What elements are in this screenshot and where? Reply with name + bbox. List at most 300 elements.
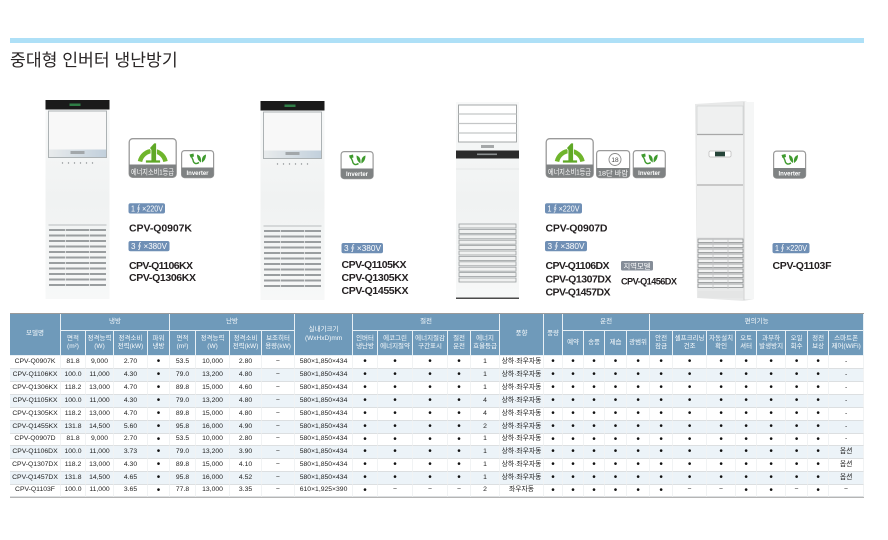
row: CPV-Q1305KX [10, 408, 864, 421]
row: CPV-Q1306KX: • [636, 382, 640, 393]
row: CPV-Q0907K: 53.5 [176, 358, 189, 365]
row: CPV-Q1106KX: • [614, 369, 617, 380]
table header: columns: 제습 [610, 339, 622, 346]
row: CPV-Q1455KX: 2 [483, 423, 487, 430]
row: CPV-Q0907K: 580×1,850×434 [300, 358, 347, 365]
row: CPV-Q1103F: CPV-Q1103F [15, 486, 55, 493]
row: CPV-Q1106DX: • [795, 446, 798, 457]
row: CPV-Q1105KX: • [428, 395, 432, 406]
row: CPV-Q1106DX: 11,000 [89, 448, 110, 455]
table header: columns: 인버터 [356, 335, 374, 342]
row: CPV-Q1105KX: • [457, 395, 461, 406]
model names: CPV-Q1305KX [342, 272, 408, 284]
icon: inverter: Inverter [186, 171, 209, 177]
row: CPV-Q0907D: 2.70 [124, 435, 137, 442]
row: CPV-Q0907K: • [457, 356, 461, 367]
model names [546, 260, 612, 298]
table header: columns: (W) [94, 343, 105, 350]
row: CPV-Q1305KX: 580×1,850×434 [300, 410, 347, 417]
row: CPV-Q1103F: 11,000 [89, 486, 110, 493]
row: CPV-Q1306KX: 13,000 [89, 384, 110, 391]
row: CPV-Q1307DX: • [428, 459, 432, 470]
row: CPV-Q0907K: 10,000 [202, 358, 223, 365]
row: CPV-Q1305KX: CPV-Q1305KX [12, 410, 58, 417]
row: CPV-Q0907K: 9,000 [91, 358, 108, 365]
row: CPV-Q1457DX: • [571, 472, 575, 483]
row: CPV-Q0907K: • [816, 356, 820, 367]
row: CPV-Q1105KX: • [614, 395, 617, 406]
row: CPV-Q1455KX: • [688, 421, 691, 432]
row: CPV-Q1106KX: • [157, 369, 160, 380]
model names: CPV-Q1455KX [342, 285, 408, 297]
row: CPV-Q1106KX: • [592, 369, 596, 380]
table header: groups: 절전 [420, 318, 432, 325]
row: CPV-Q1457DX: 131.8 [64, 474, 82, 481]
row: CPV-Q0907K: • [769, 356, 773, 367]
row: CPV-Q1306KX: • [719, 382, 723, 393]
row: CPV-Q1106KX: - [845, 371, 847, 378]
row: CPV-Q1457DX: 4.52 [239, 474, 252, 481]
row: CPV-Q1106KX: • [719, 369, 723, 380]
row: CPV-Q1306KX: • [457, 382, 461, 393]
row: CPV-Q1305KX: • [719, 408, 723, 419]
row: CPV-Q1105KX: • [157, 395, 160, 406]
row: CPV-Q1455KX: • [659, 421, 663, 432]
specification table [10, 313, 864, 498]
row: CPV-Q1103F [10, 485, 864, 497]
row: CPV-Q1106DX: • [592, 446, 596, 457]
row: CPV-Q1457DX: • [551, 472, 555, 483]
row: CPV-Q1105KX: • [571, 395, 575, 406]
row: CPV-Q1306KX: • [816, 382, 820, 393]
row: CPV-Q1307DX: CPV-Q1307DX [12, 461, 58, 468]
row: CPV-Q1306KX: • [363, 382, 367, 393]
row: CPV-Q1455KX: • [457, 421, 461, 432]
row: CPV-Q1105KX: 4.30 [124, 397, 137, 404]
row: CPV-Q1305KX: • [636, 408, 640, 419]
row: CPV-Q1455KX: • [795, 421, 798, 432]
row: CPV-Q1305KX: 118.2 [65, 410, 81, 417]
row: CPV-Q1305KX: • [428, 408, 432, 419]
row: CPV-Q1106DX: 3.90 [239, 448, 252, 455]
row: CPV-Q1455KX: • [363, 421, 367, 432]
table header: columns: 셀프크리닝 [675, 335, 705, 342]
row: CPV-Q1105KX: • [816, 395, 820, 406]
row: CPV-Q1106DX: • [614, 446, 617, 457]
row: CPV-Q1305KX: • [614, 408, 617, 419]
table header: groups: 모델명 [26, 330, 44, 337]
row: CPV-Q1455KX: • [592, 421, 596, 432]
table header: columns: 냉난방 [356, 343, 374, 350]
row: CPV-Q1305KX: • [457, 408, 461, 419]
row: CPV-Q0907K: • [614, 356, 617, 367]
icon: energy grade 1 [129, 139, 176, 177]
row: CPV-Q1307DX: • [393, 459, 397, 470]
row: CPV-Q1106KX: • [363, 369, 367, 380]
row: CPV-Q1106KX: 580×1,850×434 [300, 371, 347, 378]
row: CPV-Q1106KX: − [276, 371, 280, 378]
row: CPV-Q1455KX: − [276, 423, 280, 430]
row: CPV-Q1457DX: • [363, 472, 367, 483]
row: CPV-Q0907D: 81.8 [66, 435, 80, 442]
row: CPV-Q0907D: 2.80 [239, 435, 252, 442]
row: CPV-Q1103F: 2 [483, 486, 487, 493]
row: CPV-Q0907D: - [845, 435, 847, 442]
row: CPV-Q1457DX: • [688, 472, 691, 483]
table header: columns: 발생방지 [759, 343, 783, 350]
row: CPV-Q1103F: 좌우자동 [509, 486, 534, 493]
table header: columns: 전력(kW) [233, 343, 258, 350]
row: CPV-Q1457DX: 옵션 [840, 474, 852, 481]
table header: columns: 광범위 [629, 339, 647, 346]
row: CPV-Q1103F: 3.35 [239, 486, 252, 493]
voltage chip: single phase: 1∮×220V [131, 204, 164, 213]
row: CPV-Q1106DX: 3.73 [124, 448, 137, 455]
row: CPV-Q0907K: • [744, 356, 748, 367]
row: CPV-Q1306KX: CPV-Q1306KX [12, 384, 58, 391]
table header: columns: 건조 [684, 343, 696, 350]
table header: columns: 에코그린 [383, 335, 407, 342]
table header: columns [61, 331, 864, 356]
row: CPV-Q1457DX: • [636, 472, 640, 483]
table header: columns: 용량(kW) [265, 343, 291, 350]
row: CPV-Q1455KX: CPV-Q1455KX [12, 423, 58, 430]
row: CPV-Q0907K: • [795, 356, 798, 367]
icon: inverter: Inverter [346, 172, 369, 178]
row: CPV-Q1305KX: • [571, 408, 575, 419]
icon: energy grade 1: 에너지소비1등급 [548, 167, 591, 176]
row: CPV-Q1455KX: • [428, 421, 432, 432]
row: CPV-Q0907D: CPV-Q0907D [14, 435, 56, 442]
row: CPV-Q1105KX: • [744, 395, 748, 406]
row: CPV-Q0907K: - [845, 358, 847, 365]
row: CPV-Q1106DX: CPV-Q1106DX [12, 448, 58, 455]
table header: columns: 오토 [740, 335, 752, 342]
row: CPV-Q1103F: 100.0 [64, 486, 82, 493]
row: CPV-Q1305KX: − [276, 410, 280, 417]
row: CPV-Q1103F: − [457, 486, 461, 493]
row: CPV-Q1105KX: • [769, 395, 773, 406]
row: CPV-Q0907D: 1 [483, 435, 487, 442]
row: CPV-Q1105KX: • [551, 395, 555, 406]
row: CPV-Q1106KX: • [551, 369, 555, 380]
icon: inverter [633, 151, 665, 178]
row: CPV-Q0907K: 상하·좌우자동 [502, 358, 541, 365]
row: CPV-Q1306KX: 118.2 [65, 384, 81, 391]
row: CPV-Q1106KX: 13,200 [202, 371, 223, 378]
row: CPV-Q1307DX: 4.10 [239, 461, 252, 468]
table header: columns: 송풍 [588, 339, 600, 346]
voltage chip: three phase: 3∮×380V [131, 242, 168, 251]
row: CPV-Q1105KX: • [636, 395, 640, 406]
row: CPV-Q1106DX: 79.0 [176, 448, 189, 455]
row: CPV-Q1307DX: 118.2 [65, 461, 81, 468]
row: CPV-Q1103F: − [393, 486, 397, 493]
row: CPV-Q1106KX: • [688, 369, 691, 380]
row: CPV-Q1307DX: • [157, 459, 160, 470]
table header: columns: 에너지 [476, 335, 494, 342]
row: CPV-Q1103F: − [276, 486, 280, 493]
row: CPV-Q1457DX: • [428, 472, 432, 483]
row: CPV-Q1457DX: • [744, 472, 748, 483]
row: CPV-Q1106KX: • [795, 369, 798, 380]
row: CPV-Q1105KX: • [659, 395, 663, 406]
row: CPV-Q0907D: 상하·좌우자동 [502, 435, 541, 442]
icon: inverter [341, 152, 373, 179]
row: CPV-Q1103F: − [688, 486, 692, 493]
table header: columns: (W) [207, 343, 218, 350]
row: CPV-Q1457DX: − [276, 474, 280, 481]
row: CPV-Q1305KX: 15,000 [202, 410, 223, 417]
row: CPV-Q1105KX: • [363, 395, 367, 406]
row: CPV-Q1305KX: • [592, 408, 596, 419]
row: CPV-Q1106DX: • [393, 446, 397, 457]
row: CPV-Q1307DX: 1 [483, 461, 487, 468]
model names: CPV-Q1457DX [546, 286, 610, 298]
table header: groups: 풍량 [547, 330, 559, 337]
row: CPV-Q1306KX: 4.70 [124, 384, 137, 391]
row: CPV-Q1455KX: • [393, 421, 397, 432]
model name: CPV-Q0907K [129, 222, 192, 234]
row: CPV-Q1105KX: 79.0 [176, 397, 189, 404]
row: CPV-Q0907D: − [276, 435, 280, 442]
icon: inverter: Inverter [638, 171, 661, 177]
row: CPV-Q1457DX [10, 472, 864, 485]
row: CPV-Q1307DX: 580×1,850×434 [300, 461, 347, 468]
row: CPV-Q1105KX: 4 [483, 397, 487, 404]
row: CPV-Q1106DX: • [719, 446, 723, 457]
row: CPV-Q1457DX: • [457, 472, 461, 483]
row: CPV-Q1306KX: • [744, 382, 748, 393]
row: CPV-Q1307DX: • [795, 459, 798, 470]
row: CPV-Q1306KX: • [614, 382, 617, 393]
model names [129, 260, 196, 284]
row: CPV-Q1457DX: 1 [483, 474, 487, 481]
regional model chip [621, 261, 653, 270]
row: CPV-Q1455KX: 580×1,850×434 [300, 423, 347, 430]
row: CPV-Q1105KX: 13,200 [202, 397, 223, 404]
row: CPV-Q1455KX: • [744, 421, 748, 432]
product: CPV-Q0907D series unit [456, 102, 519, 299]
row: CPV-Q1306KX: • [795, 382, 798, 393]
table header: columns: 보상 [812, 343, 824, 350]
row: CPV-Q0907D: 53.5 [176, 435, 189, 442]
row: CPV-Q1106DX: • [688, 446, 691, 457]
row: CPV-Q1457DX: • [592, 472, 596, 483]
row: CPV-Q1307DX: 옵션 [840, 461, 852, 468]
table header: columns: 면적 [177, 335, 189, 342]
row: CPV-Q1105KX: • [688, 395, 691, 406]
row: CPV-Q1307DX: 15,000 [202, 461, 223, 468]
row: CPV-Q1106KX [10, 369, 864, 382]
row: CPV-Q1305KX: • [659, 408, 663, 419]
row: CPV-Q1307DX: • [744, 459, 748, 470]
table header: columns: 확인 [715, 343, 727, 350]
table header: columns: (m²) [67, 343, 79, 350]
row: CPV-Q1105KX: - [845, 397, 847, 404]
row: CPV-Q1103F: − [719, 486, 723, 493]
row: CPV-Q1305KX: • [551, 408, 555, 419]
voltage chip: three phase: 3∮×380V [344, 244, 382, 253]
row: CPV-Q1455KX: • [571, 421, 575, 432]
row: CPV-Q0907K: • [636, 356, 640, 367]
row: CPV-Q0907D: 580×1,850×434 [300, 435, 347, 442]
row: CPV-Q1106KX: • [744, 369, 748, 380]
row: CPV-Q1307DX: • [688, 459, 691, 470]
row: CPV-Q1307DX [10, 459, 864, 472]
model names: CPV-Q1106KX [129, 260, 193, 272]
model names: CPV-Q1306KX [129, 272, 196, 284]
row: CPV-Q1106KX: 1 [483, 371, 487, 378]
row: CPV-Q1457DX: • [795, 472, 798, 483]
row: CPV-Q1306KX: - [845, 384, 847, 391]
row: CPV-Q1306KX: 1 [483, 384, 487, 391]
icon: inverter: Inverter [778, 172, 801, 178]
row: CPV-Q1305KX: • [795, 408, 798, 419]
row: CPV-Q0907K: • [363, 356, 367, 367]
row: CPV-Q1455KX: 131.8 [64, 423, 82, 430]
row: CPV-Q1103F: 13,000 [202, 486, 223, 493]
row: CPV-Q1106KX: 4.80 [239, 371, 252, 378]
row: CPV-Q1455KX: 4.90 [239, 423, 252, 430]
row: CPV-Q1106DX: • [551, 446, 555, 457]
row: CPV-Q0907K: CPV-Q0907K [15, 358, 55, 365]
row: CPV-Q1106DX: 13,200 [202, 448, 223, 455]
row: CPV-Q1455KX: • [769, 421, 773, 432]
row: CPV-Q1455KX: 상하·좌우자동 [502, 423, 541, 430]
icon: inverter [774, 151, 806, 178]
row: CPV-Q1106DX [10, 446, 864, 459]
table header: groups: 편의기능 [745, 318, 769, 325]
row: CPV-Q1105KX: • [795, 395, 798, 406]
row: CPV-Q1106KX: 4.30 [124, 371, 137, 378]
row: CPV-Q1307DX: 4.30 [124, 461, 137, 468]
row: CPV-Q0907D: 10,000 [202, 435, 223, 442]
table header: columns: 운전 [453, 343, 465, 350]
row: CPV-Q0907K: 2.70 [124, 358, 137, 365]
row: CPV-Q1307DX: 13,000 [89, 461, 110, 468]
table header: columns: 정전 [812, 335, 824, 342]
table header: columns: 과부하 [762, 335, 780, 342]
row: CPV-Q1307DX: • [816, 459, 820, 470]
row: CPV-Q0907K: 1 [483, 358, 487, 365]
table header: columns: 파워 [153, 335, 164, 342]
row: CPV-Q1457DX: • [659, 472, 663, 483]
row: CPV-Q1455KX: - [845, 423, 847, 430]
row: CPV-Q1457DX: 4.65 [124, 474, 137, 481]
row: CPV-Q1105KX: 상하·좌우자동 [502, 397, 541, 404]
table header: groups: 운전 [600, 318, 612, 325]
row: CPV-Q1457DX: • [393, 472, 397, 483]
icon: energy grade 1 [546, 139, 593, 177]
row: CPV-Q1106DX: • [457, 446, 461, 457]
row: CPV-Q1305KX: 4.80 [239, 410, 252, 417]
table header: groups: 난방 [226, 318, 238, 325]
row: CPV-Q1457DX: • [769, 472, 773, 483]
table header: columns: 예약 [567, 339, 579, 346]
model names: CPV-Q1106DX [546, 260, 610, 272]
icon: 18 step wind [597, 151, 630, 178]
row: CPV-Q1305KX: - [845, 410, 847, 417]
row: CPV-Q1457DX: 580×1,850×434 [300, 474, 347, 481]
voltage chip: three phase: 3∮×380V [548, 242, 585, 251]
table header: columns: 잠금 [655, 343, 667, 350]
row: CPV-Q1455KX: • [551, 421, 555, 432]
row: CPV-Q1106DX: • [571, 446, 575, 457]
row: CPV-Q1106KX: • [659, 369, 663, 380]
row: CPV-Q1105KX: • [592, 395, 596, 406]
row: CPV-Q1306KX: • [157, 382, 160, 393]
table header: columns: 구간표시 [418, 343, 442, 350]
row: CPV-Q0907K: 81.8 [66, 358, 80, 365]
row: CPV-Q1455KX: • [636, 421, 640, 432]
table header: columns: (m²) [177, 343, 188, 350]
row: CPV-Q1306KX: • [393, 382, 397, 393]
icon: 18 step wind: 18 [611, 157, 619, 164]
table header: columns: 냉방 [153, 343, 164, 350]
row: CPV-Q1103F: − [428, 486, 432, 493]
row: CPV-Q1455KX: 95.8 [176, 423, 189, 430]
icon: 18 step wind: 18단 바람 [598, 168, 628, 178]
row: CPV-Q1305KX: 13,000 [89, 410, 110, 417]
table header: groups: 냉방 [109, 318, 121, 325]
row: CPV-Q1307DX: • [363, 459, 367, 470]
row: CPV-Q1106KX: • [816, 369, 820, 380]
row: CPV-Q1306KX: • [571, 382, 575, 393]
row: CPV-Q1306KX: • [659, 382, 663, 393]
row: CPV-Q0907K: − [276, 358, 280, 365]
row: CPV-Q1305KX: • [393, 408, 397, 419]
row: CPV-Q1307DX: • [457, 459, 461, 470]
row: CPV-Q1305KX: • [157, 408, 160, 419]
row: CPV-Q1305KX: • [744, 408, 748, 419]
row: CPV-Q0907K [10, 356, 864, 369]
row: CPV-Q1106KX: CPV-Q1106KX [13, 371, 57, 378]
row: CPV-Q1306KX: • [592, 382, 596, 393]
row: CPV-Q1106DX: − [276, 448, 280, 455]
row: CPV-Q1307DX: • [571, 459, 575, 470]
row: CPV-Q1306KX: • [688, 382, 691, 393]
row: CPV-Q1307DX: • [769, 459, 773, 470]
row: CPV-Q1457DX: 14,500 [89, 474, 110, 481]
row: CPV-Q1106KX: • [428, 369, 432, 380]
row: CPV-Q1455KX [10, 421, 864, 434]
table header: columns: 셔터 [740, 343, 752, 350]
row: CPV-Q1305KX: • [688, 408, 691, 419]
icon: energy grade 1: 에너지소비1등급 [131, 167, 174, 176]
table header: groups: 풍향 [516, 330, 528, 337]
row: CPV-Q0907K: • [551, 356, 555, 367]
row: CPV-Q1455KX: • [816, 421, 820, 432]
row: CPV-Q1305KX: • [816, 408, 820, 419]
row: CPV-Q0907D [10, 434, 864, 446]
row: CPV-Q1106DX: • [744, 446, 748, 457]
table header: columns: 오일 [791, 335, 803, 342]
row: CPV-Q0907D: 9,000 [91, 435, 108, 442]
table header: columns: 보조히터 [266, 335, 290, 342]
row: CPV-Q1306KX: − [276, 384, 280, 391]
row: CPV-Q1457DX: 상하·좌우자동 [502, 474, 541, 481]
row: CPV-Q1106DX: • [157, 446, 160, 457]
row: CPV-Q1305KX: • [363, 408, 367, 419]
row: CPV-Q1103F: 610×1,925×390 [300, 486, 347, 493]
row: CPV-Q1105KX: − [276, 397, 280, 404]
product: CPV-Q1105KX series unit [260, 101, 324, 300]
row: CPV-Q1305KX: 4 [483, 410, 487, 417]
row: CPV-Q1106DX: • [769, 446, 773, 457]
row: CPV-Q1457DX: • [614, 472, 617, 483]
row: CPV-Q1103F: − [795, 486, 799, 493]
